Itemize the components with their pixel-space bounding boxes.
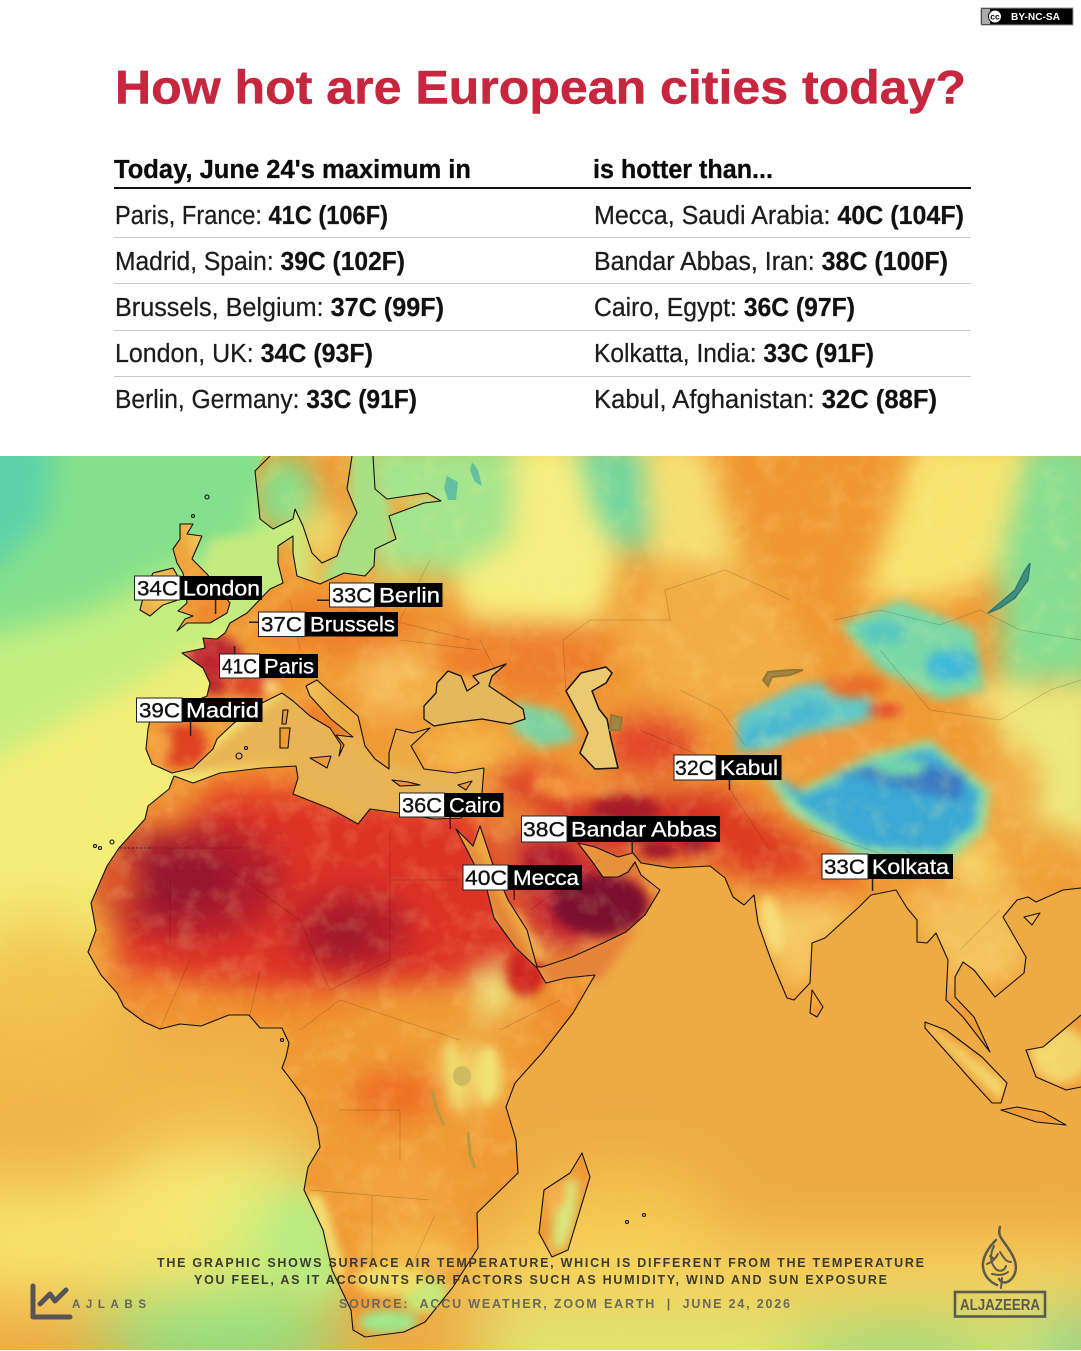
row: Cairo: Cairo, Egypt: 36C (97F)	[594, 294, 855, 322]
row: Kabul: Kabul, Afghanistan: 32C (88F)	[594, 386, 937, 414]
map label: Berlin: Berlin	[379, 584, 440, 608]
licence badge	[981, 8, 1073, 25]
map label: Madrid: 39C	[139, 700, 180, 722]
map label: Mecca: 40C	[465, 867, 507, 890]
temperature map	[0, 400, 1081, 1351]
row: London: London, UK: 34C (93F)	[115, 340, 373, 368]
licence badge: cc	[990, 12, 1000, 22]
Aral and Balkhash	[610, 670, 803, 730]
map label: Mecca: Mecca	[513, 867, 579, 890]
map label: Kabul: 32C	[675, 757, 714, 780]
map label: London	[134, 576, 262, 614]
map label: Mecca	[463, 865, 582, 900]
map label: Paris: Paris	[264, 656, 314, 678]
map label: Kolkata: Kolkata	[872, 856, 949, 879]
mottled terrain texture	[91, 456, 1081, 1322]
map label: Bandar Abbas	[522, 816, 720, 853]
Western Sahara border dash	[120, 848, 150, 849]
map label: Paris: 41C	[222, 656, 257, 678]
land temperature field	[88, 456, 1081, 1336]
AJLabs logo	[33, 1286, 146, 1317]
Black Sea	[424, 664, 525, 726]
coastlines	[88, 456, 1081, 1337]
inland seas and lakes	[424, 462, 1030, 1168]
map label: Madrid	[136, 698, 262, 736]
row: Kolkatta: Kolkatta, India: 33C (91F)	[594, 340, 874, 368]
country borders	[120, 560, 1081, 1270]
map label: Paris	[220, 646, 318, 678]
footnote: THE GRAPHIC SHOWS SURFACE AIR TEMPERATURE, WHICH IS DIFFERENT FROM THE TEMPERATURE	[157, 1256, 924, 1270]
AJLabs logo: AJLABS	[72, 1299, 146, 1311]
logo wordmark: ALJAZEERA	[960, 1297, 1040, 1314]
map label: Kolkata: 33C	[824, 856, 865, 879]
Lake Baikal	[988, 563, 1030, 613]
map label: Berlin: 33C	[332, 584, 372, 608]
map label: Cairo: 36C	[402, 794, 442, 818]
Ladoga and Onega lakes	[444, 462, 482, 500]
map label: Bandar Abbas: 38C	[523, 818, 565, 842]
footnote	[157, 1256, 924, 1287]
row: Madrid: Madrid, Spain: 39C (102F)	[115, 248, 405, 276]
row: Bandar Abbas: Bandar Abbas, Iran: 38C (100F)	[594, 248, 948, 276]
African rift lakes	[432, 1090, 475, 1168]
map label: Berlin	[317, 583, 442, 608]
table header left: Today, June 24's maximum in	[114, 156, 471, 184]
row: Berlin: Berlin, Germany: 33C (91F)	[115, 386, 417, 414]
map label: London: 34C	[137, 578, 178, 600]
footnote: YOU FEEL, AS IT ACCOUNTS FOR FACTORS SUCH AS HUMIDITY, WIND AND SUN EXPOSURE	[194, 1273, 887, 1287]
map label: Cairo: Cairo	[449, 794, 501, 818]
row: Brussels: Brussels, Belgium: 37C (99F)	[115, 294, 444, 322]
source line: SOURCE: ACCU WEATHER, ZOOM EARTH | JUNE 24, 2026	[339, 1297, 790, 1311]
map label: London: London	[183, 578, 260, 600]
map label: Bandar Abbas: Bandar Abbas	[571, 818, 717, 842]
map label: Kolkata	[822, 854, 953, 891]
map label: Kabul	[674, 755, 782, 790]
row: Paris: Paris, France: 41C (106F)	[115, 202, 388, 230]
map label: Brussels	[249, 612, 398, 636]
Caspian Sea	[566, 667, 618, 769]
Al Jazeera logo	[955, 1227, 1045, 1316]
row: Mecca: Mecca, Saudi Arabia: 40C (104F)	[594, 202, 964, 230]
map label: Madrid: Madrid	[186, 700, 259, 722]
logo flame	[983, 1227, 1016, 1288]
map label: Cairo	[400, 793, 504, 829]
licence badge: BY-NC-SA	[1011, 12, 1060, 23]
table header right: is hotter than...	[593, 156, 773, 184]
map label: Brussels: Brussels	[310, 614, 395, 636]
ocean temperature field	[0, 400, 1081, 1351]
map label: Brussels: 37C	[261, 614, 302, 636]
title: How hot are European cities today?	[115, 62, 966, 114]
map label: Kabul: Kabul	[720, 757, 778, 780]
Lake Victoria	[453, 1066, 471, 1086]
comparison table	[114, 156, 971, 414]
